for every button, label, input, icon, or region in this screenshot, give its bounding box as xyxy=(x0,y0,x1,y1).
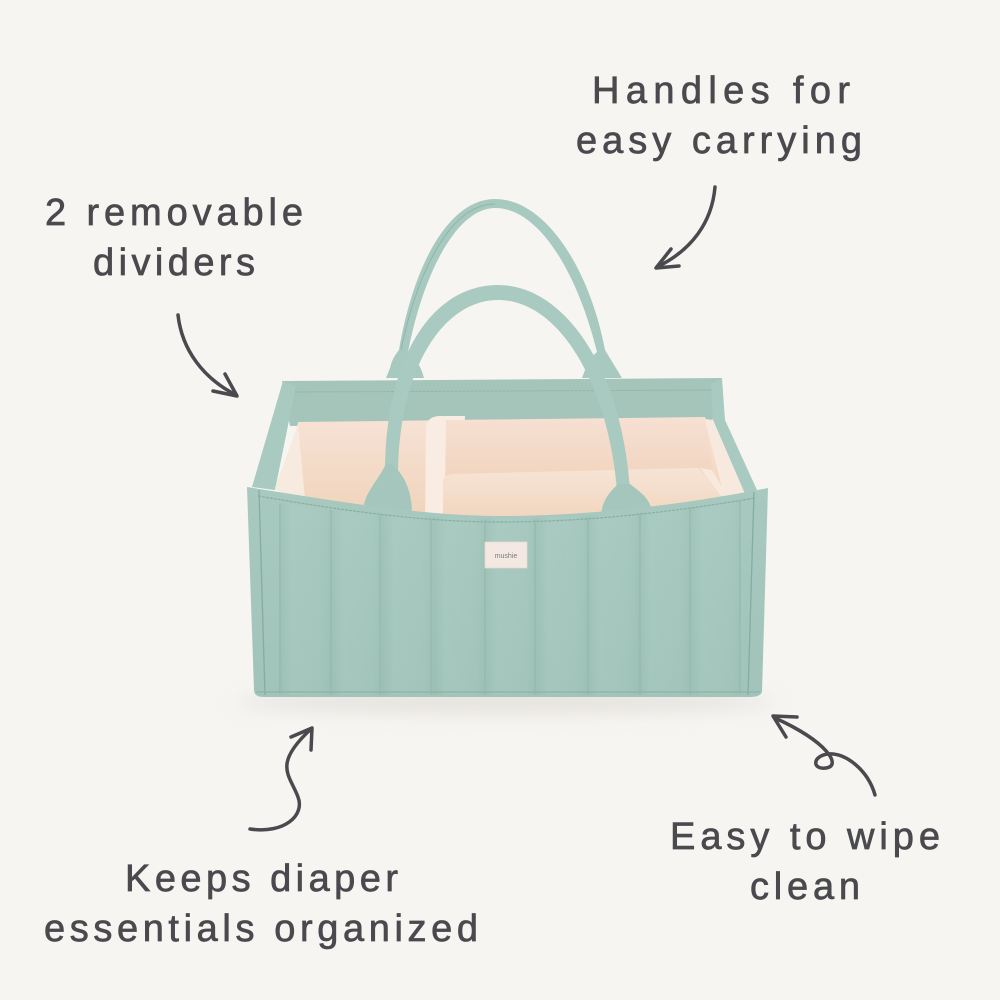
heading: keeps diaper essentials organized: essentials organized xyxy=(44,908,478,950)
heading: easy to wipe clean: clean xyxy=(750,866,860,908)
heading: handles for easy carrying xyxy=(576,70,862,162)
arrow: easy to wipe xyxy=(773,716,875,795)
quilted seams xyxy=(280,500,740,695)
floor shadow xyxy=(235,690,775,714)
heading: easy to wipe clean: Easy to wipe xyxy=(670,816,940,858)
arrow: handles xyxy=(656,187,715,268)
interior lining xyxy=(280,417,735,525)
right wall xyxy=(711,378,757,494)
heading: 2 removable dividers: 2 removable xyxy=(45,192,303,234)
heading: handles for easy carrying: easy carrying xyxy=(576,120,862,162)
bottom edge xyxy=(256,691,760,693)
back inner panel xyxy=(282,378,722,426)
arrow: keeps organized xyxy=(250,728,312,830)
arrow: dividers xyxy=(178,315,237,396)
heading: 2 removable dividers xyxy=(45,192,303,284)
right lining wedge xyxy=(705,419,745,500)
product: storage caddy bag xyxy=(235,199,775,714)
brand label: mushie xyxy=(495,553,517,560)
left lining wedge xyxy=(275,424,306,510)
low divider xyxy=(443,468,724,525)
tall divider xyxy=(425,416,465,525)
front rim stitching xyxy=(258,496,755,522)
brand label xyxy=(485,542,527,568)
back handle xyxy=(386,199,622,378)
heading: keeps diaper essentials organized xyxy=(44,858,478,950)
side seams xyxy=(259,490,754,695)
front panel xyxy=(247,487,768,697)
front handle xyxy=(364,285,652,516)
quilted shading xyxy=(279,500,740,695)
heading: easy to wipe clean xyxy=(670,816,940,908)
left wall xyxy=(252,381,296,490)
rear compartment xyxy=(445,418,716,490)
heading: handles for easy carrying: Handles for xyxy=(592,70,850,112)
handle tabs xyxy=(364,464,412,514)
back rim stitching xyxy=(295,390,712,392)
heading: keeps diaper essentials organized: Keeps diaper xyxy=(125,858,398,900)
heading: 2 removable dividers: dividers xyxy=(93,242,255,284)
